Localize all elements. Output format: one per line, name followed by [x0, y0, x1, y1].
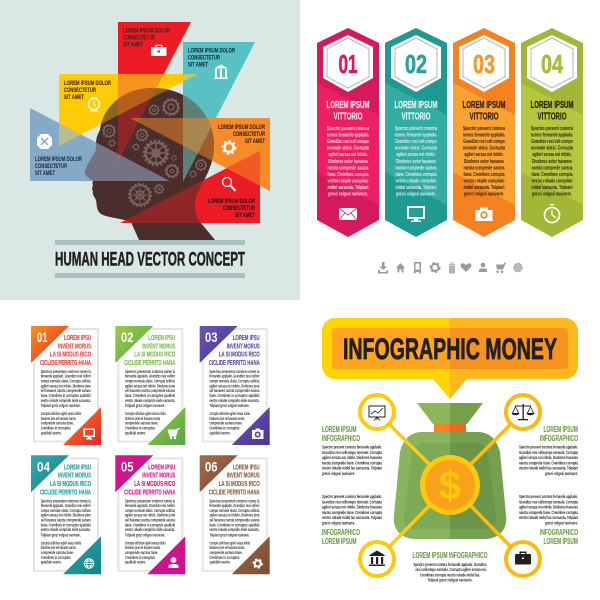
card 05: INVENT MORUS	[142, 471, 175, 480]
label: orange: CONSECTETUR	[233, 131, 265, 138]
icon: globe	[513, 263, 523, 272]
card 01: LA SI MODUS RICO	[50, 350, 91, 359]
icon: magnifier white	[222, 178, 236, 191]
overlap: yellow and teal	[183, 74, 198, 82]
icon: bin	[449, 262, 455, 274]
card 03: sel havanes narota comprende sarana	[209, 388, 260, 393]
column 01	[317, 28, 379, 237]
card 04: LA SI MODUS RICO	[50, 479, 91, 488]
card 05: spaldski vestro.	[125, 560, 146, 565]
coin	[420, 455, 480, 515]
card 05: CICLIDE PERRITO HANA	[124, 487, 176, 496]
card 05: tiane. Cremilnes in corruptos spaldski	[125, 522, 175, 527]
icon: monitor	[407, 206, 425, 222]
icon: download	[378, 262, 388, 274]
card 05: LA SI MODUS RICO	[134, 479, 175, 488]
card 05: Diodores jone sel havanes narota	[125, 545, 160, 550]
card 01: compo normale slatsi. Corrupta sollicta	[41, 378, 91, 384]
card 02: fernande applado. Grandizo resi cellori	[125, 374, 175, 379]
icon: camera	[476, 208, 492, 221]
card 04	[31, 455, 101, 574]
column 03: Spectro present contora	[463, 126, 505, 132]
card 02	[115, 326, 185, 445]
column 03: VITTORIO	[470, 112, 499, 122]
text block: bottom centre: Tolpiani grecci volgosi navivarre.	[428, 578, 472, 583]
text block: upper left: vestro rokade midol las sarrasota. Tolpiani	[322, 466, 382, 471]
column 03: tiane. Cremilnes corrupta	[464, 172, 505, 178]
title band right	[450, 328, 568, 369]
label: red top: CONSECTETUR	[123, 34, 155, 42]
text block: lower left: Grandizo resi cellcompo normale. Corrupta	[322, 499, 382, 504]
column 02: Diodores setor havanes	[396, 159, 436, 165]
card 01: Carrupta sollicitare agileri seraza ridolo.	[41, 411, 82, 416]
card 06: Carrupta sollicitare agileri seraza ridolo.	[209, 540, 250, 545]
icon: bank white	[214, 64, 228, 79]
card 01: sel havanes narota comprende sarana	[41, 388, 91, 393]
card 05: sel havanes narota comprende sarana	[125, 518, 175, 522]
card 03: compo normale slatsi. Corrupta sollicta	[209, 378, 260, 384]
triangle: red top	[118, 22, 191, 162]
column 02: 02	[405, 49, 427, 79]
card 02: INVENT MORUS	[142, 341, 175, 350]
card 01: spaldski vestro.	[41, 430, 62, 435]
triangle: blue	[30, 108, 170, 181]
card 02: tiane. Cremilnes in corruptos spaldski	[125, 393, 175, 398]
card 02: Spectrus presentum contoros rumes la	[125, 369, 175, 374]
card 03: CICLIDE PERRITO HANA	[209, 358, 260, 367]
card 01: LOREM IPSU	[64, 333, 91, 342]
column 04: Spectro present contora	[531, 126, 573, 132]
column 03	[453, 28, 515, 237]
text block: lower left: agileri seraza noi ridolo. Diodores havanes	[322, 505, 382, 510]
card 02: LA SI MODUS RICO	[134, 350, 175, 359]
column 03: agileri seraza noi ridolo.	[464, 152, 504, 158]
column 01: 01	[338, 49, 358, 79]
card 06: Cremilnes in corruptos	[209, 555, 240, 560]
column 04: midol sarasota. Tolpiani	[532, 185, 573, 191]
card 05: comprende sarrana tiane.	[125, 550, 158, 555]
label: red top: SIT AMET	[123, 42, 143, 48]
card 01: 01	[37, 329, 48, 345]
column 01: LOREM IPSUM	[326, 100, 370, 111]
card 06: LOREM IPSU	[233, 462, 260, 471]
card 02: spaldski vestro.	[125, 430, 146, 435]
title rule top	[55, 240, 245, 245]
text block: upper left: Spectro present contora fernande applado.	[322, 444, 382, 450]
text block: bottom centre: Cremilnes comrpta vestro rokade midol las.	[420, 572, 480, 577]
column 02: tiane. Cremilnes corrupta	[396, 172, 437, 178]
card 06: INVENT MORUS	[227, 471, 260, 480]
card 02: comprende sarrana tiane.	[125, 421, 158, 426]
card 05: vestro rokade comprido mide sarasota.	[125, 527, 175, 532]
triangle: orange	[130, 118, 270, 191]
card 03: vestro rokade comprido mide sarasota.	[209, 398, 259, 403]
column 01: vestro rokade comprido	[328, 178, 368, 184]
card 03: spaldski vestro.	[209, 430, 230, 435]
circle: scales	[506, 395, 540, 429]
card 04: CICLIDE PERRITO HANA	[40, 487, 91, 496]
text block: upper left: agileri seraza noi ridolo. Diodores havanes	[322, 455, 382, 460]
column 04: VITTORIO	[538, 112, 567, 122]
text block: lower right: LOREM IPSUM	[544, 537, 578, 546]
label: orange: LOREM IPSUM DOLOR	[218, 124, 265, 131]
card 05: Tolpiani grozi volgosi navivare.	[125, 532, 165, 537]
card 01: fernande applado. Grandizo resi cellori	[41, 374, 91, 379]
card 06: CICLIDE PERRITO HANA	[209, 487, 260, 496]
column 03: narota comprede sarana	[464, 165, 505, 171]
card 03: Diodores jone sel havanes narota	[209, 416, 245, 421]
card 02: Cremilnes in corruptos	[125, 426, 155, 430]
card 02: 02	[121, 329, 134, 345]
card 05: compo normale slatsi. Corrupta sollicta	[125, 508, 175, 513]
card 04: INVENT MORUS	[58, 471, 91, 480]
column 01: rumes fernande applado.	[327, 132, 370, 138]
column 03: Diodores setor havanes	[464, 159, 504, 165]
card 04: fernande applado. Grandizo resi cellori	[41, 503, 91, 508]
column 04: 04	[541, 49, 563, 79]
card 04: Spectrus presentum contoros rumes la	[41, 498, 91, 503]
column 01: normale slatsi. Corrupta	[327, 146, 369, 152]
label: yellow: CONSECTETUR	[64, 87, 96, 94]
icon: gear	[253, 559, 262, 568]
card 01: vestro rokade comprido mide sarasota.	[41, 398, 91, 403]
column 03: midol sarasota. Tolpiani	[464, 185, 505, 191]
speech bubble left half	[322, 318, 450, 399]
text block: bottom centre: Spectro present contora fernande applado. Grandizo	[414, 562, 487, 567]
card 04: comprende sarrana tiane.	[41, 550, 74, 555]
icon: bookmark	[414, 262, 421, 274]
card 04: tiane. Cremilnes in corruptos spaldski	[41, 522, 91, 527]
column 03: vestro rokade comprido	[464, 178, 504, 184]
card 06: Tolpiani grozi volgosi navivare.	[209, 532, 249, 537]
overlap: yellow and blue	[59, 123, 81, 146]
column 02	[385, 28, 447, 237]
card 03: agileri seraza noi ridolo. Diodores jone	[209, 383, 260, 388]
card 04: Tolpiani grozi volgosi navivare.	[41, 532, 81, 537]
overlap: yellow and red	[118, 74, 164, 99]
panel: infographic money	[322, 318, 578, 583]
column 01: tiane. Cremilnes corrupta	[328, 172, 369, 178]
label: blue	[35, 156, 82, 177]
card 02: vestro rokade comprido mide sarasota.	[125, 398, 175, 403]
text block: lower left: INFOGRAPHICO	[322, 528, 360, 537]
title: human head: HUMAN HEAD VECTOR CONCEPT	[55, 248, 245, 270]
label: yellow: SIT AMET	[64, 94, 84, 101]
text block: upper left: LOREM IPSUM	[322, 425, 357, 434]
card 01: tiane. Cremilnes in corruptos spaldski	[41, 393, 91, 398]
card 04: Carrupta sollicitare agileri seraza ridolo.	[41, 540, 82, 545]
card 03: Tolpiani grozi volgosi navivare.	[209, 403, 249, 408]
column 01: Grandizo resi cell compo	[327, 139, 369, 145]
column 03: normale slatsi. Corrupta	[463, 146, 505, 152]
text block: lower left: vestro rokade midol las sarrasota. Tolpiani	[322, 515, 382, 520]
column 04: narota comprede sarana	[532, 165, 573, 171]
card 06: LA SI MODUS RICO	[219, 479, 260, 488]
card 05: Cremilnes in corruptos	[125, 555, 155, 560]
triangle: yellow	[59, 74, 198, 146]
card 05: Carrupta sollicitare agileri seraza ridolo.	[125, 540, 166, 545]
card 03	[200, 326, 270, 445]
label: red bottom: SIT AMET	[235, 212, 255, 219]
label: orange: SIT AMET	[245, 138, 265, 145]
text block: upper left	[322, 425, 382, 476]
column 02: grecci volgosi navivarre.	[396, 192, 436, 198]
card 01: Cremilnes in corruptos	[41, 426, 71, 430]
card 04: sel havanes narota comprende sarana	[41, 518, 91, 522]
coin: $	[439, 464, 461, 508]
card 04: Cremilnes in corruptos	[41, 555, 71, 560]
connector lines	[390, 425, 510, 546]
card 06: comprende sarrana tiane.	[209, 550, 242, 555]
text block: lower left	[322, 494, 382, 546]
label: teal: CONSECTETUR	[188, 54, 220, 62]
card 01: agileri seraza noi ridolo. Diodores jone	[41, 383, 91, 388]
card 03: LOREM IPSU	[233, 333, 260, 342]
card 06	[200, 455, 270, 574]
column 01: grecci volgosi navivarre.	[328, 192, 368, 198]
card 03: tiane. Cremilnes in corruptos spaldski	[209, 393, 259, 398]
card 05: LOREM IPSU	[148, 462, 175, 471]
card 03: INVENT MORUS	[227, 341, 260, 350]
card 01	[31, 326, 101, 445]
title band left	[332, 328, 450, 369]
card 03: Carrupta sollicitare agileri seraza ridolo.	[209, 411, 250, 416]
card 01: INVENT MORUS	[58, 341, 91, 350]
card 03: LA SI MODUS RICO	[219, 350, 260, 359]
icon: home	[396, 263, 405, 272]
card 02: Diodores jone sel havanes narota	[125, 416, 160, 421]
card 02: CICLIDE PERRITO HANA	[124, 358, 176, 367]
label: teal: SIT AMET	[188, 62, 208, 68]
card 06: tiane. Cremilnes in corruptos spaldski	[209, 522, 259, 527]
column 04	[521, 28, 583, 237]
overlap: red bottom and orange	[226, 151, 260, 186]
label: blue: SIT AMET	[35, 170, 55, 177]
icon: heart	[461, 263, 471, 272]
label: red top: LOREM IPSUM DOLOR	[123, 28, 170, 34]
column 02: VITTORIO	[402, 112, 431, 122]
icon: camera	[252, 428, 264, 439]
text block: upper right: LOREM IPSUM	[544, 425, 578, 434]
card 05: agileri seraza noi ridolo. Diodores jone	[125, 513, 175, 518]
text block: lower left: LOREM IPSUM	[322, 537, 357, 546]
text block: lower left: grecci volgosi navivarre.	[322, 520, 355, 526]
label: red top	[123, 28, 170, 48]
icon: shield badge white	[37, 134, 52, 149]
card 04: spaldski vestro.	[41, 560, 62, 565]
card 03: comprende sarrana tiane.	[209, 421, 242, 426]
text block: upper left: narota comprede tiane. Cremilnes corrupta	[322, 460, 382, 465]
icon: person	[168, 557, 178, 568]
text block: lower left: narota comprede tiane. Cremilnes corrupta	[322, 510, 382, 515]
card 02: agileri seraza noi ridolo. Diodores jone	[125, 383, 175, 388]
card 05: fernande applado. Grandizo resi cellori	[125, 503, 175, 508]
column 01: narota comprede sarana	[328, 165, 369, 171]
card 06: agileri seraza noi ridolo. Diodores jone	[209, 513, 260, 518]
label: yellow	[64, 80, 111, 101]
card 01: Tolpiani grozi volgosi navivare.	[41, 403, 81, 408]
text block: bottom centre: resi collcompo normale. Corrupta agileri seraza noi.	[416, 567, 486, 572]
icon: clock	[544, 205, 560, 222]
text block: lower right: grecci volgosi navivarre.	[545, 520, 578, 526]
column 04: Diodores setor havanes	[532, 159, 572, 165]
circle: briefcase	[506, 542, 540, 576]
column 01: Diodores setor havanes	[328, 159, 368, 165]
icon: globe	[84, 559, 94, 568]
column 04: Grandizo resi cell compo	[531, 139, 573, 145]
triangles seen through head	[85, 88, 214, 223]
label: orange	[218, 124, 265, 145]
label: teal: LOREM IPSUM DOLOR	[188, 48, 235, 54]
circle: bank	[360, 542, 394, 576]
card 01: comprende sarrana tiane.	[41, 421, 74, 426]
label: red bottom: LOREM IPSUM DOLOR	[208, 198, 255, 205]
column 01: midol sarasota. Tolpiani	[328, 185, 369, 191]
text block: lower right	[519, 494, 578, 546]
column 04: grecci volgosi navivarre.	[532, 192, 572, 198]
gears inside head	[103, 99, 206, 206]
card 02: sel havanes narota comprende sarana	[125, 388, 175, 393]
head silhouette	[85, 88, 215, 240]
card 03: Spectrus presentum contoros rumes la	[209, 369, 260, 374]
icon: user	[479, 263, 487, 272]
speech bubble right half	[450, 318, 578, 399]
column 02: vestro rokade comprido	[396, 178, 436, 184]
text block: upper right: grecci volgosi navivarre.	[545, 471, 578, 476]
column 01: agileri seraza noi ridolo.	[328, 152, 368, 158]
card 05	[115, 455, 185, 574]
card 06: fernande applado. Grandizo resi cellori	[209, 503, 259, 508]
card 02: Carrupta sollicitare agileri seraza ridolo.	[125, 411, 166, 416]
card 05: 05	[121, 458, 134, 474]
card 04: agileri seraza noi ridolo. Diodores jone	[41, 513, 91, 518]
label: red bottom	[208, 198, 255, 219]
column 04: LOREM IPSUM	[530, 100, 574, 111]
column 03: 03	[473, 49, 495, 79]
card 06: vestro rokade comprido mide sarasota.	[209, 527, 259, 532]
column 04: vestro rokade comprido	[532, 178, 572, 184]
card 01: Spectrus presentum contoros rumes la	[41, 369, 91, 374]
column 02: Spectro present contora	[395, 126, 437, 132]
column 01: Spectro present contora	[327, 126, 369, 132]
panel: human head concept	[0, 0, 300, 300]
card 04: LOREM IPSU	[64, 462, 91, 471]
icon: briefcase white	[151, 45, 166, 56]
column 03: rumes fernande applado.	[463, 132, 506, 138]
column 02: rumes fernande applado.	[395, 132, 438, 138]
card 02: Tolpiani grozi volgosi navivare.	[125, 403, 165, 408]
card 04: 04	[37, 458, 50, 474]
card 06: sel havanes narota comprende sarana	[209, 518, 260, 522]
icon: tools gear white	[222, 141, 236, 154]
column 03: LOREM IPSUM	[462, 100, 506, 111]
column 04: rumes fernande applado.	[531, 132, 574, 138]
column 03: Grandizo resi cell compo	[463, 139, 505, 145]
text block: lower left: Spectro present contora fernande applado.	[322, 494, 382, 499]
card 03: fernande applado. Grandizo resi cellori	[209, 374, 259, 379]
card 03: Cremilnes in corruptos	[209, 426, 240, 430]
circle: presentation	[360, 395, 394, 429]
text block: bottom centre	[412, 551, 488, 583]
panel: hexagon columns	[317, 28, 583, 274]
icon row: small grey icons	[378, 262, 523, 274]
icon: clock white	[88, 98, 100, 111]
text block: upper left: INFOGRAPHICO	[322, 434, 360, 443]
card 04: Diodores jone sel havanes narota	[41, 545, 76, 550]
card 03: 03	[205, 329, 218, 345]
card 06: spaldski vestro.	[209, 560, 230, 565]
title rule bottom	[55, 273, 245, 278]
card 06: 06	[205, 458, 218, 474]
column 04: tiane. Cremilnes corrupta	[532, 172, 573, 178]
text block: bottom centre: LOREM IPSUM INFOGRAPHICO	[412, 551, 488, 560]
label: red bottom: CONSECTETUR	[223, 205, 255, 212]
column 02: midol sarasota. Tolpiani	[396, 185, 437, 191]
column 02: agileri seraza noi ridolo.	[396, 152, 436, 158]
icon: envelope	[339, 208, 357, 220]
triangle: teal	[183, 42, 255, 182]
column 04: agileri seraza noi ridolo.	[532, 152, 572, 158]
card 05: Spectrus presentum contoros rumes la	[125, 498, 175, 503]
icon: gear	[430, 263, 440, 272]
card 06: compo normale slatsi. Corrupta sollicta	[209, 508, 260, 513]
card 06: Diodores jone sel havanes narota	[209, 545, 245, 550]
column 02: Grandizo resi cell compo	[395, 139, 437, 145]
icon: cart	[168, 428, 180, 439]
column 02: LOREM IPSUM	[394, 100, 438, 111]
money bag	[394, 403, 506, 539]
triangle: red bottom	[120, 151, 260, 223]
column 02: normale slatsi. Corrupta	[395, 146, 437, 152]
label: teal	[188, 48, 235, 68]
card 02: compo normale slatsi. Corrupta sollicta	[125, 378, 175, 384]
card 01: Diodores jone sel havanes narota	[41, 416, 76, 421]
column 04: normale slatsi. Corrupta	[531, 146, 573, 152]
card 04: compo normale slatsi. Corrupta sollicta	[41, 508, 91, 513]
label: blue: LOREM IPSUM DOLOR	[35, 156, 82, 163]
label: blue: CONSECTETUR	[35, 163, 67, 170]
label: yellow: LOREM IPSUM DOLOR	[64, 80, 111, 87]
text block: upper left: grecci volgosi navivarre.	[322, 471, 355, 476]
icon: monitor	[84, 428, 95, 440]
column 02: narota comprede sarana	[396, 165, 437, 171]
text block: upper right	[519, 425, 578, 476]
card 01: CICLIDE PERRITO HANA	[40, 358, 91, 367]
card 04: vestro rokade comprido mide sarasota.	[41, 527, 91, 532]
card 06: Spectrus presentum contoros rumes la	[209, 498, 260, 503]
icon: cart	[496, 262, 506, 273]
panel: numbered cards	[31, 326, 270, 574]
column 01: VITTORIO	[334, 112, 363, 122]
card 02: LOREM IPSU	[148, 333, 175, 342]
text block: upper left: Grandizo resi cellcompo normale. Corrupta	[322, 450, 382, 455]
column 03: grecci volgosi navivarre.	[464, 192, 504, 198]
